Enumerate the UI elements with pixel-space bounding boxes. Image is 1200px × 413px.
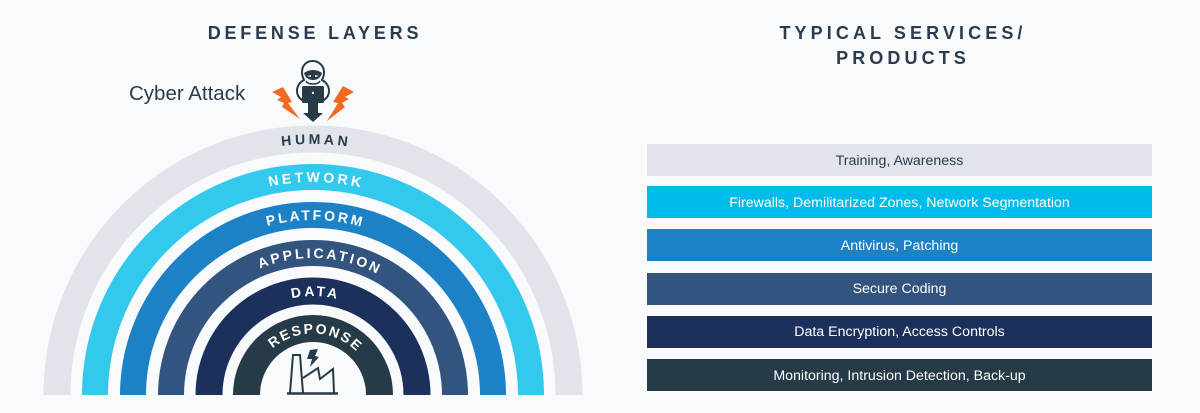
service bar: application: Secure Coding — [853, 281, 946, 297]
title: typical services and products: PRODUCTS — [836, 48, 970, 68]
icon: factory — [287, 349, 338, 394]
service bar: human — [647, 144, 1152, 176]
service bar: application — [647, 273, 1152, 305]
arc layer: application: APPLICATION — [260, 248, 380, 274]
service bar: response — [647, 359, 1152, 391]
arc layer: platform — [120, 202, 506, 395]
arc layer: data — [196, 278, 430, 395]
service bar: data: Data Encryption, Access Controls — [794, 324, 1005, 340]
arc layer: platform: PLATFORM — [266, 210, 362, 226]
arc layer: response: RESPONSE — [268, 324, 362, 351]
arc layer: application — [158, 240, 468, 395]
service bar: network — [647, 186, 1152, 218]
service bar: network: Firewalls, Demilitarized Zones, Network Segmentation — [729, 195, 1070, 211]
icon: right lightning bolt — [327, 86, 354, 121]
service bar: data — [647, 316, 1152, 348]
label: cyber attack: Cyber Attack — [129, 82, 245, 105]
icon: hooded hacker with laptop — [297, 61, 329, 122]
service bar: human: Training, Awareness — [836, 153, 963, 169]
icon: left lightning bolt — [272, 87, 300, 119]
arc layer: response — [233, 315, 393, 395]
service bar: platform — [647, 229, 1152, 261]
arc layer: human — [44, 126, 582, 395]
arc layer: human: HUMAN — [282, 134, 348, 146]
arc layer: network: NETWORK — [268, 172, 362, 188]
title: defense layers: DEFENSE LAYERS — [208, 23, 422, 43]
arc layer: network — [82, 164, 544, 395]
title: typical services and products — [779, 23, 1027, 68]
service bar: response: Monitoring, Intrusion Detection, Back-up — [773, 368, 1026, 384]
title: typical services and products: TYPICAL SERVICES/ — [779, 23, 1027, 43]
service bar: platform: Antivirus, Patching — [841, 238, 958, 254]
arc layer: data: DATA — [291, 286, 336, 299]
